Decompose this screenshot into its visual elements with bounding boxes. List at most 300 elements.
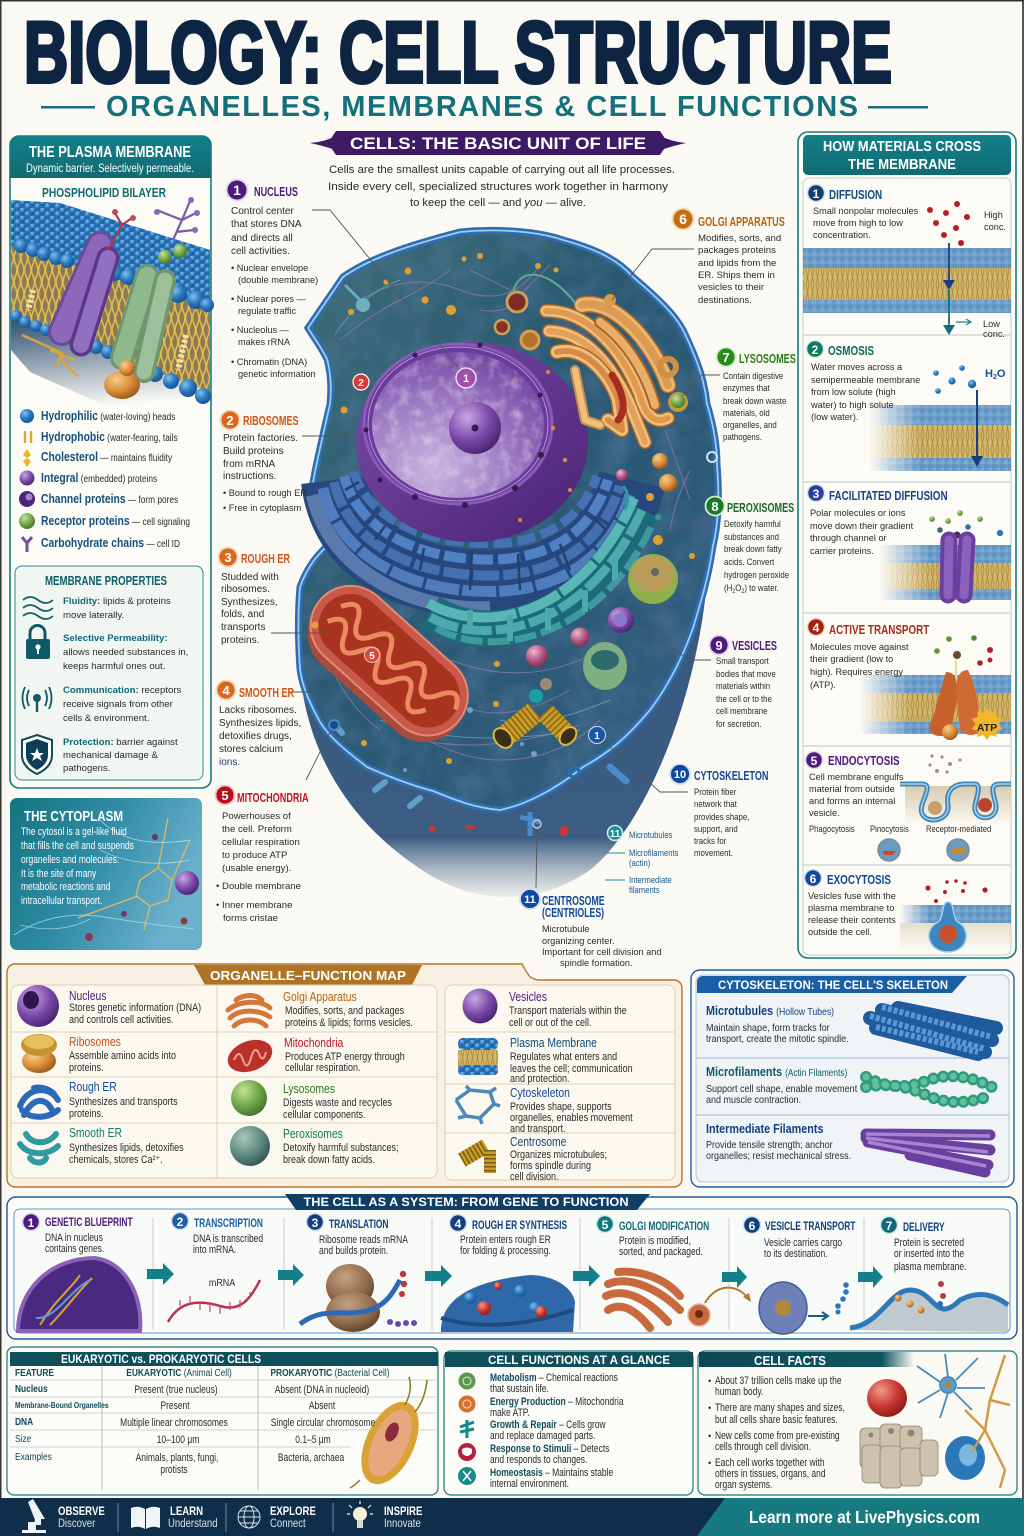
annotation: peroxisomes: hydrogen peroxide — [724, 569, 789, 580]
intermediate filaments — [706, 1121, 990, 1172]
bilayer illustration — [10, 197, 214, 412]
mini legend: cytoskeleton fibres — [605, 826, 679, 895]
step: active transport: (ATP). — [810, 680, 836, 690]
crossing header: HOW MATERIALS CROSS — [823, 139, 981, 155]
comparison table: Membrane-Bound Organelles — [15, 1400, 109, 1410]
mini legend: cytoskeleton fibres: Intermediate — [629, 874, 672, 885]
panel: membrane properties — [15, 566, 203, 780]
plasma membrane row: Plasma Membrane — [510, 1037, 597, 1050]
mitochondrion — [289, 569, 486, 759]
icon: waves — [23, 597, 53, 619]
step 1: genetic blueprint: 1 — [28, 1216, 35, 1230]
lysosomes row — [231, 1080, 392, 1121]
annotation: mitochondria: • Double membrane — [216, 881, 301, 892]
panel: cytoplasm: THE CYTOPLASM — [24, 808, 123, 825]
function: growth and repair — [460, 1419, 606, 1442]
step 6: vesicle transport: Vesicle carries cargo — [764, 1237, 842, 1249]
annotation: smooth ER: ions. — [219, 757, 240, 768]
panel: cytoplasm: that fills the cell and suspends — [21, 840, 134, 852]
phospholipid bilayer heading: PHOSPHOLIPID BILAYER — [42, 185, 166, 200]
step: facilitated diffusion — [808, 484, 1011, 600]
panel: membrane properties: mechanical damage & — [63, 750, 159, 761]
bacterium illustration — [350, 1377, 430, 1493]
annotation: golgi apparatus — [672, 208, 785, 306]
annotation: peroxisomes: 8 — [711, 499, 719, 514]
icon: shield — [22, 735, 52, 774]
panel: how materials cross the membrane — [798, 132, 1016, 958]
annotation: rough ER: Synthesizes, — [221, 597, 278, 608]
step 3: translation — [300, 1214, 417, 1332]
map title tab — [194, 965, 422, 985]
annotation: rough ER: proteins. — [221, 635, 259, 646]
step 4: rough er synthesis: 4 — [455, 1217, 462, 1231]
cell body — [298, 230, 718, 810]
annotation: peroxisomes: PEROXISOMES — [727, 502, 795, 515]
panel: plasma membrane — [10, 136, 214, 788]
footer: inspire: Innovate — [384, 1517, 421, 1530]
annotation: cytoskeleton: 10 — [674, 769, 686, 781]
step 2: transcription: 2 — [177, 1215, 184, 1229]
function: response to stimuli: and responds to changes. — [490, 1454, 587, 1466]
function: metabolism — [458, 1372, 618, 1395]
annotation: nucleus: • Nucleolus — — [231, 325, 290, 335]
icon: signal — [22, 687, 52, 712]
comparison header — [10, 1352, 438, 1366]
step: exocytosis: Vesicles fuse with the — [808, 891, 896, 901]
annotation: peroxisomes: break down fatty — [724, 543, 782, 554]
panel: organelle-function map — [7, 964, 682, 1187]
banner: cells: CELLS: THE BASIC UNIT OF LIFE — [350, 134, 646, 153]
facts header — [699, 1352, 914, 1368]
annotation: vesicles: for secretion. — [716, 718, 761, 729]
facts list: About 37 trillion cells make up the — [715, 1375, 842, 1387]
annotation: ribosomes: Protein factories. — [223, 433, 298, 444]
comparison table: Nucleus — [15, 1383, 48, 1395]
annotation: nucleus: NUCLEUS — [254, 186, 298, 199]
step: exocytosis: release their contents — [808, 915, 896, 925]
annotation: cytoskeleton: CYTOSKELETON — [694, 770, 768, 783]
annotation: golgi apparatus: and lipids from the — [698, 258, 776, 269]
step 5: golgi modification: 5 — [602, 1218, 609, 1232]
cytoskeleton row: Provides shape, supports — [510, 1101, 612, 1113]
nucleus row: Stores genetic information (DNA) — [69, 1002, 201, 1014]
annotation: lysosomes: 7 — [722, 350, 730, 365]
annotation: ribosomes: Build proteins — [223, 446, 284, 457]
step: facilitated diffusion: Polar molecules or ions — [810, 508, 906, 518]
cytoskeleton row: and transport. — [510, 1123, 566, 1135]
step: facilitated diffusion: 3 — [813, 487, 820, 501]
functions header: CELL FUNCTIONS AT A GLANCE — [488, 1353, 670, 1367]
panel: cytoplasm: organelles and molecules. — [21, 854, 119, 866]
rough er row: Synthesizes and transports — [69, 1096, 178, 1108]
annotation: cytoskeleton — [670, 764, 768, 858]
step: osmosis: Water moves across a — [811, 362, 903, 372]
facts list: • — [708, 1431, 711, 1441]
footer — [0, 1498, 1024, 1536]
nucleus — [356, 342, 588, 542]
membrane legend: Cholesterol — maintains fluidity — [41, 451, 172, 464]
step: facilitated diffusion: carrier proteins. — [810, 546, 874, 556]
function: energy production: Energy Production – Mitochondria — [490, 1396, 624, 1408]
microfilaments: and muscle contraction. — [706, 1094, 801, 1105]
plasma membrane row — [458, 1037, 633, 1085]
comparison table: 10–100 μm — [157, 1434, 199, 1446]
annotation: nucleus: genetic information — [238, 369, 316, 379]
annotation: peroxisomes: acids. Convert — [724, 556, 775, 567]
cell markers: 1 — [594, 731, 600, 742]
centrosome row: cell division. — [510, 1171, 559, 1183]
annotation: mitochondria: forms cristae — [223, 913, 278, 924]
step 6: vesicle transport: VESICLE TRANSPORT — [765, 1221, 856, 1233]
cytoskeleton header: CYTOSKELETON: THE CELL'S SKELETON — [718, 978, 948, 992]
step: active transport: ACTIVE TRANSPORT — [829, 624, 929, 637]
peroxisomes row — [230, 1126, 399, 1166]
panel: membrane properties: receive signals from other — [63, 699, 174, 710]
panel: membrane properties: Protection: barrier against — [63, 737, 178, 748]
step 7: delivery — [850, 1216, 1008, 1332]
illustration: red blood cell — [867, 1379, 907, 1417]
annotation: peroxisomes: (H — [724, 582, 732, 593]
panel: membrane properties: move laterally. — [63, 610, 124, 621]
plasma membrane header: Dynamic barrier. Selectively permeable. — [26, 163, 194, 175]
footer: explore: Connect — [270, 1517, 306, 1530]
step 1: genetic blueprint: DNA in nucleus — [45, 1232, 103, 1244]
annotation: mitochondria: the cell. Preform — [222, 824, 292, 835]
step 2: transcription: mRNA — [209, 1277, 236, 1289]
step 3: translation: 3 — [312, 1216, 319, 1230]
microtubules: Microtubules (Hollow Tubes) — [706, 1003, 834, 1018]
intro text: Inside every cell, specialized structures work together in harmony — [328, 181, 668, 193]
subtitle: ORGANELLES, MEMBRANES & CELL FUNCTIONS — [106, 91, 858, 123]
step 6: vesicle transport: to its destination. — [764, 1248, 828, 1260]
peroxisomes row: break down fatty acids. — [283, 1154, 375, 1166]
function: homeostasis: Homeostasis – Maintains stable — [490, 1467, 613, 1479]
panel: cytoskeleton — [691, 970, 1014, 1187]
map card 2 — [445, 985, 675, 1183]
step: exocytosis — [804, 870, 1011, 952]
peroxisomes row: Peroxisomes — [283, 1128, 343, 1141]
step 2: transcription: into mRNA. — [193, 1244, 236, 1256]
cell illustration — [289, 230, 718, 897]
small organelles — [312, 253, 717, 837]
step 7: delivery: DELIVERY — [903, 1222, 945, 1234]
centrosome row: forms spindle during — [510, 1160, 591, 1172]
nucleus row: and controls cell activities. — [69, 1014, 174, 1026]
annotation: rough ER: transports — [221, 622, 265, 633]
step 4: rough er synthesis: ROUGH ER SYNTHESIS — [472, 1220, 567, 1232]
step: active transport: their gradient (low to — [810, 654, 893, 664]
facts list: • — [708, 1458, 711, 1468]
membrane legend: Receptor proteins — cell signaling — [41, 515, 190, 528]
footer: observe — [22, 1499, 105, 1533]
panel: membrane properties: allows needed substances in, — [63, 647, 188, 658]
step: diffusion: Small nonpolar molecules — [813, 206, 919, 216]
ribosomes row: Assemble amino acids into — [69, 1050, 177, 1062]
illustration: branching neuron — [965, 1355, 1010, 1488]
step: endocytosis: vesicle. — [809, 808, 840, 818]
step: diffusion: concentration. — [813, 230, 871, 240]
step: active transport: ATP — [977, 722, 997, 734]
comparison table: Single circular chromosome — [271, 1417, 375, 1429]
centrosome — [490, 678, 580, 752]
step 3: translation: and builds protein. — [319, 1245, 388, 1257]
annotation: smooth ER: 4 — [222, 683, 230, 698]
annotation: lysosomes: pathogens. — [723, 431, 762, 442]
function: homeostasis — [458, 1467, 613, 1490]
function: metabolism: that sustain life. — [490, 1383, 549, 1395]
panel: cytoplasm: intracellular transport. — [21, 895, 102, 907]
facts header: CELL FACTS — [754, 1354, 826, 1368]
annotation: rough ER: Studded with — [221, 572, 279, 583]
comparison table: FEATURE — [15, 1367, 54, 1379]
step: endocytosis: Pinocytosis — [870, 823, 909, 834]
annotation: rough ER: ROUGH ER — [241, 553, 290, 566]
membrane legend: Hydrophilic (water-loving) heads — [41, 410, 176, 423]
plasma membrane row: leaves the cell; communication — [510, 1063, 633, 1075]
annotation: mitochondria: • Inner membrane — [216, 900, 292, 911]
step: diffusion: conc. — [983, 329, 1005, 339]
comparison table: Present — [160, 1400, 190, 1412]
cell markers: 5 — [369, 651, 375, 662]
mini legend: cytoskeleton fibres: Microtubules — [629, 829, 673, 840]
annotation: lysosomes: break down waste — [723, 395, 786, 406]
annotation: golgi apparatus: destinations. — [698, 295, 752, 306]
microtubules: transport, create the mitotic spindle. — [706, 1033, 849, 1044]
annotation: cytoskeleton: tracks for — [694, 835, 726, 846]
step: endocytosis: ENDOCYTOSIS — [828, 755, 900, 768]
panel: cytoplasm — [10, 798, 202, 950]
panel: the cell as a system — [7, 1194, 1017, 1339]
annotation: golgi apparatus: GOLGI APPARATUS — [698, 216, 785, 229]
smooth er row: Smooth ER — [69, 1127, 122, 1140]
flow arrows — [147, 1263, 883, 1288]
facts list: organ systems. — [715, 1479, 772, 1491]
comparison table: Absent — [309, 1400, 336, 1412]
panel: membrane properties: keeps harmful ones out. — [63, 661, 165, 672]
panel: eukaryotic vs prokaryotic — [7, 1347, 438, 1495]
crossing header: THE MEMBRANE — [848, 157, 956, 173]
annotation: centrosome: spindle formation. — [560, 958, 633, 968]
annotation: smooth ER: Synthesizes lipids, — [219, 718, 301, 729]
comparison table: Size — [15, 1433, 31, 1445]
annotation: nucleus: that stores DNA — [231, 219, 302, 230]
annotation: nucleus: • Chromatin (DNA) — [231, 357, 307, 367]
cytoskeleton row — [456, 1086, 633, 1135]
golgi — [546, 294, 676, 442]
step: endocytosis: 5 — [811, 754, 818, 768]
step: osmosis: from low solute (high — [811, 387, 896, 397]
footer: observe: Discover — [58, 1517, 96, 1530]
annotation: centrosome: 11 — [524, 894, 536, 906]
annotation: peroxisomes: 2 — [732, 589, 735, 595]
step: facilitated diffusion: FACILITATED DIFFUSION — [829, 490, 948, 503]
annotation: peroxisomes: 2 — [741, 589, 744, 595]
step: exocytosis: outside the cell. — [808, 927, 872, 937]
annotation: centrosome — [520, 889, 662, 968]
cytoskeleton row: Cytoskeleton — [510, 1087, 570, 1100]
panel: membrane properties: Selective Permeability: — [63, 633, 168, 644]
annotation: cytoskeleton: Protein fiber — [694, 786, 736, 797]
annotation: nucleus: • Nuclear envelope — [231, 263, 308, 273]
annotation: lysosomes: organelles, and — [723, 419, 777, 430]
map title tab: ORGANELLE–FUNCTION MAP — [210, 968, 406, 983]
facts list: New cells come from pre-existing — [715, 1430, 840, 1442]
annotation: cytoskeleton: network that — [694, 798, 737, 809]
plasma membrane row: and protection. — [510, 1073, 570, 1085]
annotation: lysosomes — [716, 348, 796, 442]
comparison table: Animals, plants, fungi, — [136, 1452, 218, 1464]
step: active transport: 4 — [813, 621, 820, 635]
step: osmosis: H — [985, 368, 993, 380]
step: diffusion: move from high to low — [813, 218, 903, 228]
step: exocytosis: EXOCYTOSIS — [827, 874, 891, 887]
microtubules — [706, 1003, 996, 1054]
illustration: tissue cells — [860, 1424, 938, 1488]
centrosome row: Centrosome — [510, 1136, 566, 1149]
footer link: Learn more at LivePhysics.com — [749, 1507, 980, 1527]
step: diffusion: 1 — [813, 187, 820, 201]
function: response to stimuli: Response to Stimuli – Detects — [490, 1443, 610, 1455]
step: endocytosis: Receptor-mediated — [926, 823, 991, 834]
annotation: vesicles: cell membrane — [716, 705, 768, 716]
annotation: golgi apparatus: 6 — [679, 211, 687, 227]
banner: cells — [310, 131, 686, 155]
intermediate filaments: Intermediate Filaments — [706, 1121, 824, 1136]
panel: cytoplasm: It is the site of many — [21, 868, 96, 880]
step 6: vesicle transport: 6 — [749, 1219, 756, 1233]
lysosomes row: Lysosomes — [283, 1083, 335, 1096]
cell markers: 2 — [358, 378, 364, 389]
annotation: ribosomes: RIBOSOMES — [243, 415, 299, 428]
plasma membrane row: Regulates what enters and — [510, 1051, 617, 1063]
step: active transport — [808, 618, 1011, 740]
golgi row: Modifies, sorts, and packages — [285, 1005, 404, 1017]
annotation: ribosomes: instructions. — [223, 471, 276, 482]
comparison table: PROKARYOTIC (Bacterial Cell) — [270, 1367, 390, 1379]
cell markers — [353, 368, 606, 744]
step 2: transcription — [168, 1212, 263, 1322]
annotation: centrosome: Important for cell division and — [542, 947, 662, 957]
annotation: peroxisomes: Detoxify harmful — [724, 518, 781, 529]
step: osmosis: water) to high solute — [810, 400, 894, 410]
facts list: but all cells share basic features. — [715, 1414, 838, 1426]
smooth er row — [20, 1127, 184, 1166]
panel: cytoplasm: metabolic reactions and — [21, 881, 110, 893]
step: osmosis: OSMOSIS — [828, 345, 874, 358]
mini legend: cytoskeleton fibres: (actin) — [629, 857, 650, 868]
function: metabolism: Metabolism – Chemical reactions — [490, 1372, 618, 1384]
step 6: vesicle transport — [744, 1216, 856, 1334]
step 7: delivery: plasma membrane. — [894, 1261, 966, 1273]
mini legend: cytoskeleton fibres: Microfilaments — [629, 847, 679, 858]
centrosome row: Organizes microtubules; — [510, 1149, 607, 1161]
function: energy production: make ATP. — [490, 1407, 530, 1419]
cell markers: 1 — [463, 373, 469, 385]
golgi row: proteins & lipids; forms vesicles. — [285, 1017, 413, 1029]
step: endocytosis: material from outside — [809, 784, 895, 794]
annotation: vesicles: the cell or to the — [716, 693, 772, 704]
panel: cell facts — [698, 1351, 1017, 1495]
footer: learn: LEARN — [170, 1505, 203, 1518]
annotation: vesicles: bodies that move — [716, 668, 776, 679]
annotation: smooth ER: Lacks ribosomes. — [219, 705, 297, 716]
crossing header — [803, 135, 1011, 175]
annotation: vesicles — [710, 636, 777, 729]
step: active transport: high). Requires energy — [810, 667, 903, 677]
plasma membrane header — [10, 136, 211, 178]
step: facilitated diffusion: through channel or — [810, 533, 887, 543]
annotation: mitochondria — [216, 786, 309, 924]
comparison header: EUKARYOTIC vs. PROKARYOTIC CELLS — [61, 1352, 261, 1366]
function: response to stimuli — [458, 1443, 610, 1466]
peroxisomes row: Detoxify harmful substances; — [283, 1142, 399, 1154]
microfilaments: Support cell shape, enable movement — [706, 1083, 858, 1094]
centrosome row — [462, 1136, 607, 1183]
panel: cytoplasm: The cytosol is a gel-like fluid — [21, 826, 127, 838]
lysosomes row: cellular components. — [283, 1109, 366, 1121]
step 1: genetic blueprint: GENETIC BLUEPRINT — [45, 1217, 133, 1229]
mitochondria row — [223, 1034, 405, 1078]
annotation: nucleus: regulate traffic — [238, 306, 296, 316]
rough er row: proteins. — [69, 1108, 104, 1120]
comparison table: protists — [160, 1464, 188, 1476]
step: endocytosis: Phagocytosis — [809, 823, 855, 834]
step: osmosis — [806, 340, 1011, 471]
leader lines — [271, 210, 722, 888]
membrane legend: Hydrophobic (water-fearing, tails — [41, 431, 178, 444]
annotation: nucleus: cell activities. — [231, 246, 290, 257]
step 7: delivery: or inserted into the — [894, 1248, 964, 1260]
comparison table: Present (true nucleus) — [134, 1384, 218, 1396]
annotation: rough ER — [218, 548, 290, 646]
rough ER — [313, 472, 632, 608]
step 4: rough er synthesis: for folding & processing. — [460, 1245, 551, 1257]
step 5: golgi modification — [596, 1216, 751, 1328]
function: energy production — [458, 1396, 624, 1419]
annotation: golgi apparatus: Modifies, sorts, and — [698, 233, 781, 244]
step: diffusion: DIFFUSION — [829, 189, 882, 202]
annotation: vesicles: VESICLES — [732, 640, 777, 653]
cytoskeleton fibers — [320, 265, 690, 760]
comparison table — [15, 1367, 390, 1476]
step: endocytosis: and forms an internal — [809, 796, 895, 806]
panel: membrane properties: MEMBRANE PROPERTIES — [45, 574, 167, 588]
annotation: golgi apparatus: vesicles to their — [698, 282, 765, 293]
annotation: nucleus: Control center — [231, 206, 294, 217]
nucleus row: Nucleus — [69, 990, 107, 1003]
facts list: Each cell works together with — [715, 1457, 825, 1469]
annotation: golgi apparatus: packages proteins — [698, 245, 776, 256]
step 3: translation: TRANSLATION — [329, 1219, 388, 1231]
mitochondria row: Mitochondria — [284, 1037, 344, 1050]
step 2: transcription: TRANSCRIPTION — [194, 1218, 263, 1230]
step 5: golgi modification: GOLGI MODIFICATION — [619, 1221, 709, 1233]
annotation: vesicles: 9 — [715, 638, 723, 653]
annotation: nucleus: (double membrane) — [238, 275, 318, 285]
annotation: nucleus: and directs all — [231, 233, 293, 244]
annotation: peroxisomes: O — [735, 582, 742, 593]
nucleus row — [17, 985, 201, 1027]
membrane legend: Channel proteins — form pores — [41, 493, 178, 506]
annotation: lysosomes: materials, old — [723, 407, 770, 418]
step 7: delivery: 7 — [886, 1219, 893, 1233]
annotation: nucleus: 1 — [233, 182, 241, 198]
comparison table: Examples — [15, 1451, 52, 1463]
annotation: vesicles: materials within — [716, 680, 770, 691]
step 1: genetic blueprint — [18, 1214, 140, 1331]
annotation: rough ER: ribosomes. — [221, 584, 270, 595]
panel: membrane properties: pathogens. — [63, 763, 110, 774]
